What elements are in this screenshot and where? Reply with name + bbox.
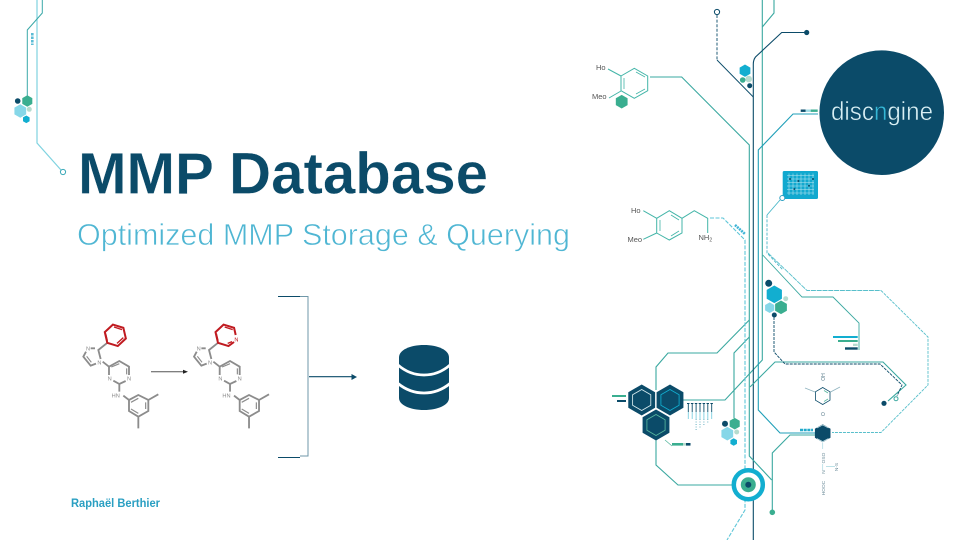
target ring — [734, 470, 763, 499]
molecule: pyridine compound: N — [234, 338, 238, 344]
molecule: pyridine compound: N — [218, 376, 222, 382]
icon: open node top — [714, 9, 720, 15]
rotated chemical chain: HOOC — [821, 480, 827, 495]
hexagon cluster middle — [765, 280, 788, 318]
molecule: rotated ring: OH — [821, 373, 827, 381]
molecule: NH2 compound — [628, 206, 745, 244]
molecule: pyridine compound: N — [238, 376, 242, 382]
molecule: phenyl compound: N — [86, 347, 90, 353]
logo: discngine — [831, 96, 933, 126]
rotated chemical chain: N — [821, 470, 827, 474]
stacked bars right — [833, 336, 858, 350]
output arrow — [309, 374, 357, 380]
molecule: pyridine compound: N — [208, 360, 212, 366]
connector tag near logo — [801, 110, 818, 112]
molecule: NH2 compound: Ho — [631, 206, 641, 215]
rotated chemical chain: OSO — [821, 452, 827, 463]
molecule: NH2 compound: NH — [698, 233, 709, 242]
molecule: phenyl compound: HN — [112, 393, 120, 399]
molecule: phenyl compound: N — [108, 376, 112, 382]
icon: plate grid — [780, 171, 818, 200]
title: MMP Database — [78, 142, 488, 206]
hexagon cluster top — [740, 64, 752, 88]
small bars left of hexagons — [612, 395, 626, 402]
molecule: pyridine compound: N — [197, 347, 201, 353]
icon: dark node top — [804, 30, 809, 35]
molecule: NH2 compound: 2 — [709, 238, 712, 244]
connector tag near hexagon — [800, 429, 813, 431]
author: Raphaël Berthier — [71, 498, 161, 510]
molecule: Ho/Meo ring: Meo — [592, 92, 607, 101]
molecule: Ho/Meo ring: Ho — [596, 63, 606, 72]
molecule: rotated ring: O — [821, 412, 827, 416]
reaction arrow — [151, 370, 188, 374]
circuit lines — [650, 0, 928, 540]
dark hexagon node — [815, 424, 830, 442]
molecule: phenyl compound — [83, 325, 158, 428]
hexagon trio — [628, 384, 683, 440]
molecule: pyridine compound — [194, 325, 269, 428]
comb pattern — [687, 403, 714, 430]
hexagon cluster lower — [721, 418, 740, 446]
molecule: pyridine compound: HN — [222, 393, 231, 399]
tag below hexagons — [665, 440, 690, 446]
molecule: rotated ring — [805, 373, 840, 416]
green end node — [770, 510, 775, 515]
left circuit decoration — [14, 0, 66, 175]
logo — [819, 50, 944, 175]
icon: database — [398, 345, 450, 410]
subtitle: Optimized MMP Storage & Querying — [77, 217, 570, 252]
molecule: phenyl compound: N — [97, 360, 101, 366]
molecule: Ho/Meo ring — [592, 63, 648, 108]
molecule: phenyl compound: N — [127, 376, 131, 382]
end nodes right — [881, 397, 898, 406]
bracket — [278, 296, 308, 458]
rotated chemical chain — [821, 443, 840, 495]
molecule: NH2 compound: Meo — [628, 235, 642, 244]
rotated chemical chain: N-S — [834, 463, 840, 471]
